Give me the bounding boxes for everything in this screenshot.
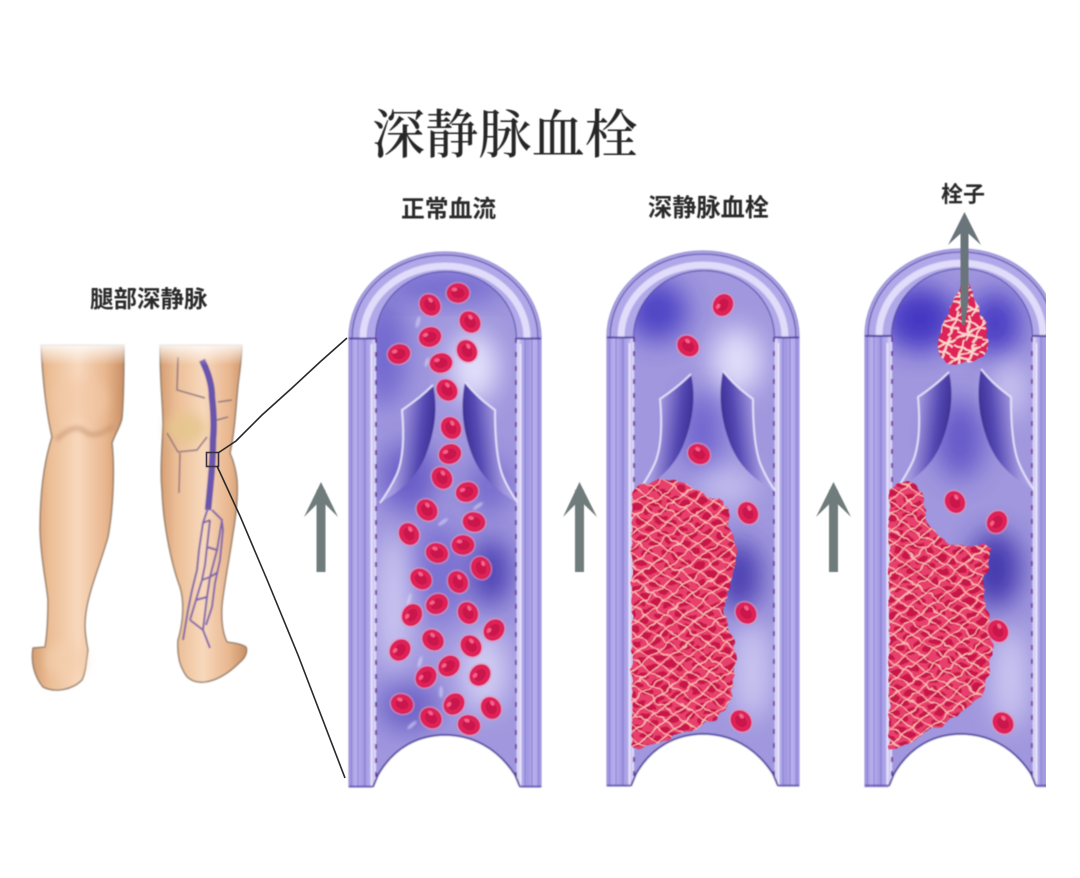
label: normal blood flow: 正常血流 [401,196,496,223]
embolus mesh [937,283,990,366]
blood clot, vessel 2 [629,478,738,750]
red blood cells, vessel 2 [671,288,764,738]
flow arrow 1 [304,482,338,572]
lumen shading 3 [884,287,1028,729]
lumen shading 2 [627,281,770,721]
vessel 1 edges and bottom opening [349,338,541,789]
red blood cells, vessel 1 [383,282,511,740]
zoom lines from leg to vessel [217,338,347,778]
valves 1 [380,382,518,503]
label: embolus: 栓子 [941,182,985,207]
flow arrow 2 [563,482,597,572]
lumen shading 1 [362,274,511,731]
blood clot remaining, vessel 3 [887,480,994,750]
vessel 1: normal blood flow [349,252,541,789]
illustration: left leg, back view [32,345,124,690]
valves 2 [638,371,776,492]
vessel 2 edges and bottom opening [607,337,799,788]
label: deep vein thrombosis: 深静脉血栓 [648,195,769,222]
platelets, vessel 1 [405,316,484,730]
red blood cells, vessel 3 [939,485,1020,740]
clot mesh 3 [887,480,994,750]
vessel 3: embolus [865,249,1057,788]
vessel 3 edges and bottom opening [865,337,1057,788]
valves 3 [896,369,1034,490]
embolus clot [937,283,990,366]
title: 深静脉血栓 [372,107,638,165]
marker: zoom box on vein [206,452,218,466]
vessel 2: deep vein thrombosis [607,251,799,788]
label: leg deep veins: 腿部深静脉 [90,286,208,312]
flow arrow 3 [816,482,851,572]
clot mesh 2 [629,478,738,750]
embolus arrow [948,212,981,325]
fade over top of legs [30,333,250,365]
illustration: right leg with deep veins [160,345,247,682]
